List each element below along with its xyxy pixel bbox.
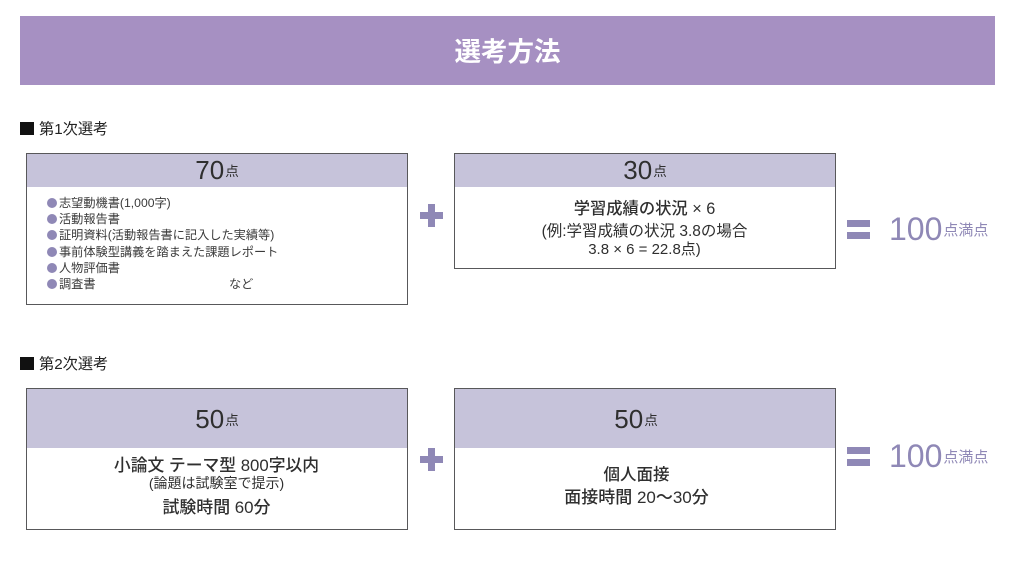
total: 100 points: 100点満点: [889, 438, 988, 474]
interview details: 個人面接: [604, 466, 670, 484]
heading: second selection: 第2次選考: [39, 356, 108, 373]
panel header: 70 points: [27, 154, 407, 187]
grade formula text: 学習成績の状況 × 6: [574, 200, 715, 218]
grade formula text: 3.8 × 6 = 22.8点): [588, 241, 701, 258]
essay details: [114, 456, 319, 517]
panel: first selection 30 points: [454, 153, 836, 269]
icon: equals: [847, 220, 870, 239]
interview details: [564, 466, 709, 507]
icon: plus: [420, 448, 443, 471]
panel header: 50 points: 50点: [614, 404, 658, 434]
list of documents: [47, 196, 278, 291]
icon: equals: [847, 447, 870, 466]
essay details: (論題は試験室で提示): [149, 475, 284, 491]
heading: first selection: 第1次選考: [39, 121, 108, 138]
interview details: 面接時間 20～30分: [564, 488, 709, 507]
list of documents: 活動報告書: [59, 212, 120, 226]
total: 100 points: 100点満点: [889, 211, 988, 247]
panel header: 30 points: [455, 154, 835, 187]
essay details: 試験時間 60分: [163, 498, 270, 517]
grade formula text: (例:学習成績の状況 3.8の場合: [542, 223, 747, 240]
list of documents: 証明資料(活動報告書に記入した実績等): [59, 228, 274, 242]
grade formula text: [542, 200, 747, 258]
list of documents: 人物評価書: [59, 261, 120, 275]
essay details: 小論文 テーマ型 800字以内: [114, 456, 319, 475]
panel: first selection 70 points: [26, 153, 408, 305]
panel: second selection essay: [26, 388, 408, 530]
title: 選考方法: [454, 37, 560, 67]
panel: second selection interview: [454, 388, 836, 530]
panel header: 50 points: 50点: [195, 404, 239, 434]
list of documents: 志望動機書(1,000字): [59, 196, 171, 210]
panel header: 70 points: 70点: [195, 155, 239, 185]
panel header: 30 points: 30点: [623, 155, 667, 185]
list of documents: など: [229, 277, 253, 291]
panel header: 50 points: [27, 389, 407, 448]
icon: plus: [420, 204, 443, 227]
list of documents: 調査書: [59, 277, 96, 291]
list of documents: 事前体験型講義を踏まえた課題レポート: [59, 245, 278, 259]
title banner: [20, 16, 995, 85]
panel header: 50 points: [455, 389, 835, 448]
